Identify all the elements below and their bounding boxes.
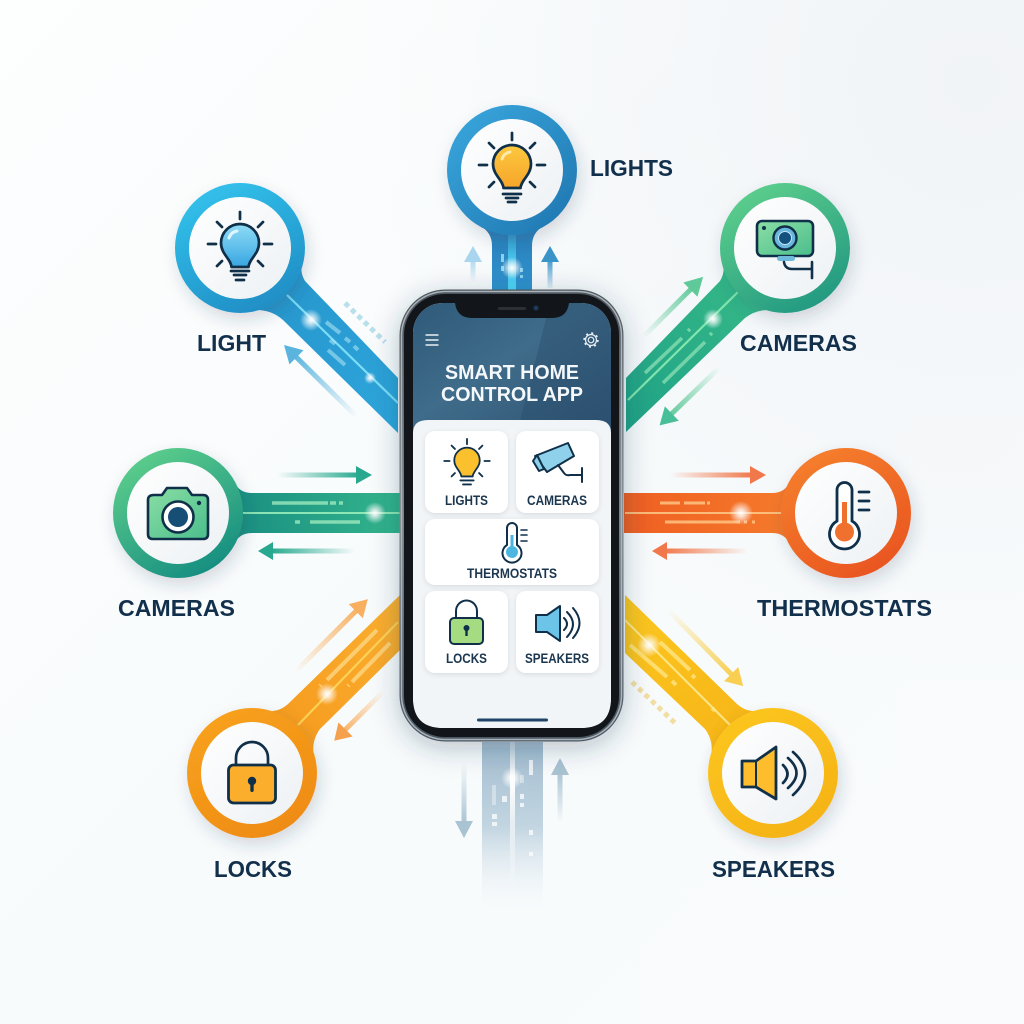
app title [441, 361, 583, 406]
card: lights [425, 431, 508, 513]
icon: wall camera [757, 221, 813, 278]
phone [400, 290, 624, 742]
card: locks: LOCKS [446, 651, 487, 666]
dots: upper left [345, 303, 385, 342]
node: lights top [447, 105, 577, 292]
arrow: bottom down [455, 763, 473, 838]
card: lights: LIGHTS [445, 493, 488, 508]
arrow: left mid right-pointing [277, 466, 372, 484]
card: thermostats [425, 519, 599, 585]
label: cameras left: CAMERAS [118, 595, 235, 621]
arrow: upper right down [653, 360, 727, 433]
icon: yellow speaker [742, 747, 805, 799]
label: speakers: SPEAKERS [712, 856, 835, 882]
icon: blue bulb [208, 212, 272, 280]
arrow: upper left [277, 338, 364, 424]
phone screen [413, 303, 611, 728]
node: light upper left [175, 183, 398, 433]
arrow: upper right up [636, 270, 710, 344]
app title: CONTROL APP [441, 383, 583, 406]
arrow: lower right [661, 603, 750, 693]
settings icon [584, 333, 598, 347]
label: thermostats: THERMOSTATS [757, 595, 932, 621]
icon: orange padlock [228, 742, 276, 803]
notch [455, 303, 569, 318]
arrow: right mid left-pointing [652, 542, 748, 560]
label: cameras right: CAMERAS [740, 330, 857, 356]
label: lights: LIGHTS [590, 155, 673, 181]
arrow: right mid right-pointing [670, 466, 766, 484]
home indicator [477, 718, 548, 722]
node: cameras left [113, 448, 400, 578]
card: cameras [516, 431, 599, 513]
phone body [400, 290, 624, 742]
label: locks: LOCKS [214, 856, 292, 882]
card: locks [425, 591, 508, 673]
node: speakers lower right [625, 595, 838, 838]
dots: lower right [632, 682, 675, 723]
node: thermostats right [624, 448, 911, 578]
app title: SMART HOME [445, 361, 579, 384]
menu icon [426, 335, 438, 345]
node: locks lower left [187, 595, 400, 838]
card: speakers: SPEAKERS [525, 651, 589, 666]
icon: photo camera [148, 488, 208, 539]
card: thermostats: THERMOSTATS [467, 566, 557, 581]
arrow: bottom up [551, 758, 569, 823]
card: cameras: CAMERAS [527, 493, 587, 508]
data stream: bottom [482, 742, 543, 912]
icon: yellow bulb [479, 133, 545, 202]
node: cameras upper right [626, 183, 850, 432]
card: speakers [516, 591, 599, 673]
arrow: lower left down [327, 685, 390, 748]
arrow: lower left up [288, 592, 375, 679]
icon: orange thermometer [830, 483, 869, 549]
label: light: LIGHT [197, 330, 267, 356]
arrow: top right up [541, 246, 559, 288]
app header [413, 303, 611, 433]
arrow: top left up [464, 246, 482, 282]
arrow: left mid left-pointing [258, 542, 355, 560]
app panel [413, 420, 611, 728]
